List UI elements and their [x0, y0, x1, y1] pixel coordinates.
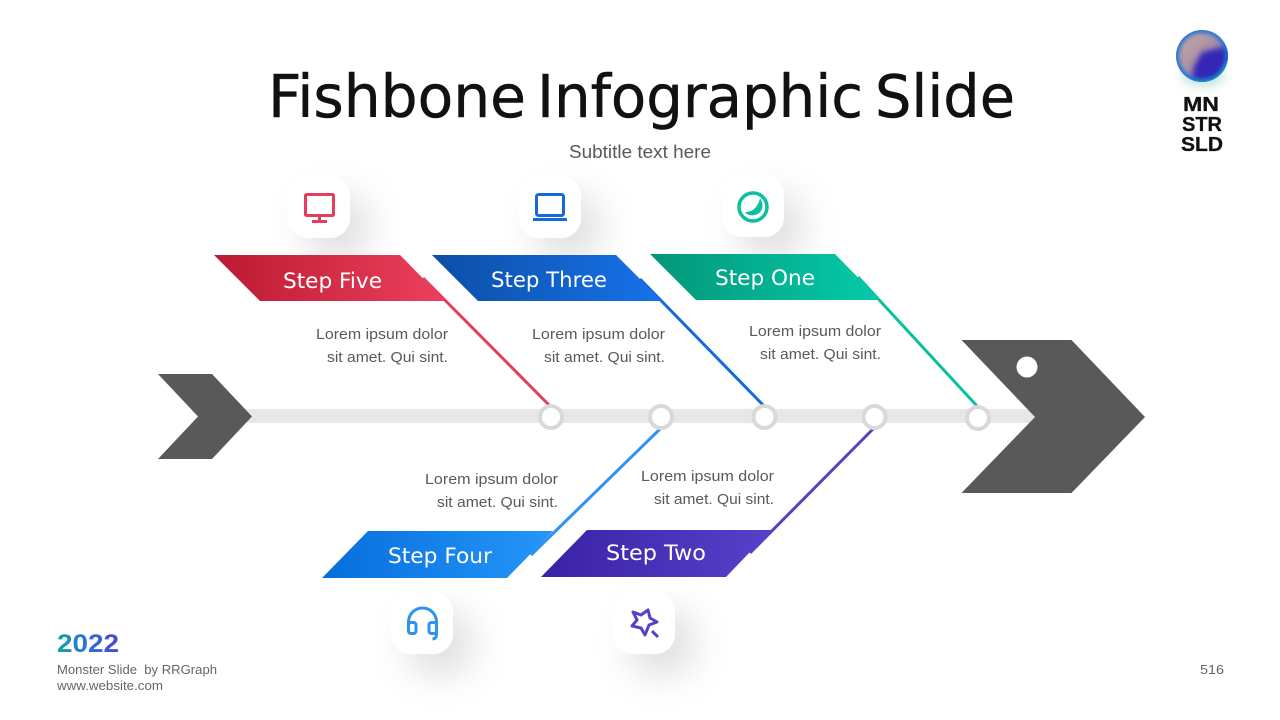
- logo text: STR: [1182, 114, 1223, 136]
- year: 2022: [57, 630, 119, 658]
- step three branch: [432, 176, 764, 406]
- description: Lorem ipsum dolor: [425, 471, 558, 488]
- footer: [56, 630, 1224, 693]
- subtitle: Subtitle text here: [569, 142, 711, 162]
- banner: [322, 531, 553, 578]
- step five branch: [214, 176, 550, 406]
- icon card: clock: [722, 175, 784, 237]
- bone line: [531, 429, 660, 555]
- description: [532, 326, 665, 366]
- step one branch: [650, 175, 977, 406]
- description: [749, 323, 881, 363]
- page number: 516: [1200, 663, 1224, 677]
- banner: Step One: [715, 266, 815, 290]
- title: Fishbone: [268, 62, 526, 131]
- banner: [214, 255, 445, 301]
- fish head: [962, 340, 1145, 493]
- website: www.website.com: [56, 679, 163, 693]
- icon card: magic star: [613, 592, 675, 654]
- description: sit amet. Qui sint.: [437, 494, 558, 511]
- banner: [541, 530, 771, 577]
- description: sit amet. Qui sint.: [327, 349, 448, 366]
- title: Infographic: [537, 62, 863, 131]
- step two branch: [541, 429, 873, 654]
- banner: [650, 254, 880, 300]
- bone line: [750, 429, 873, 553]
- logo: [1176, 30, 1228, 152]
- banner: Step Two: [606, 541, 706, 565]
- step four branch: [322, 429, 660, 654]
- title: Slide: [875, 62, 1015, 131]
- bone line: [423, 278, 550, 406]
- description: [425, 471, 558, 511]
- description: sit amet. Qui sint.: [654, 491, 774, 508]
- description: Lorem ipsum dolor: [316, 326, 448, 343]
- credit: Monster Slide by RRGraph: [57, 663, 217, 677]
- bone line: [858, 277, 977, 406]
- bone line: [640, 279, 764, 406]
- icon card: laptop: [519, 176, 581, 238]
- banner: Step Three: [491, 268, 607, 292]
- description: sit amet. Qui sint.: [760, 346, 881, 363]
- description: [641, 468, 774, 508]
- logo text: SLD: [1181, 134, 1223, 156]
- spine nodes: [540, 406, 989, 429]
- description: Lorem ipsum dolor: [749, 323, 881, 340]
- banner: Step Five: [283, 269, 382, 293]
- icon card: headset: [391, 592, 453, 654]
- fish eye: [1016, 356, 1038, 378]
- logo text: [1181, 94, 1223, 156]
- description: Lorem ipsum dolor: [532, 326, 665, 343]
- icon card: monitor: [288, 176, 350, 238]
- banner: Step Four: [388, 544, 492, 568]
- fish tail: [158, 374, 252, 459]
- banner: [432, 255, 662, 301]
- spine: [240, 409, 1040, 423]
- description: sit amet. Qui sint.: [544, 349, 665, 366]
- logo text: MN: [1183, 94, 1219, 116]
- description: Lorem ipsum dolor: [641, 468, 774, 485]
- logo orb: [1176, 30, 1228, 92]
- description: [316, 326, 448, 366]
